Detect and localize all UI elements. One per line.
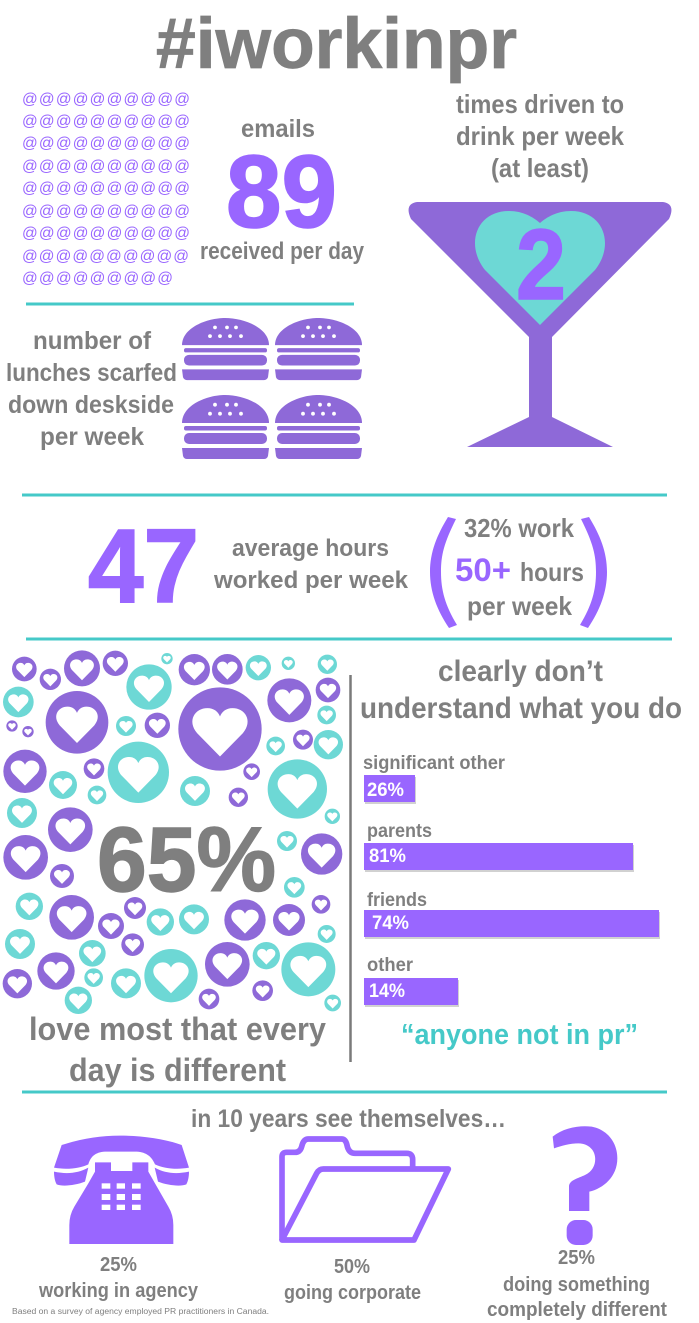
number: 89 emails: 89: [226, 134, 337, 249]
panel: email at-sign grid: @@@@@@@@@: [22, 270, 173, 287]
bar chart: 74%: [372, 913, 409, 934]
lunches text: per week: [40, 423, 144, 451]
heading: clearly don't understand: clearly don’t: [438, 655, 603, 688]
panel: email at-sign grid: @@@@@@@@@@: [22, 180, 190, 197]
lunches text: down deskside: [8, 391, 174, 419]
love most caption: love most that every: [29, 1011, 326, 1047]
bar chart: 26%: [367, 780, 404, 801]
source note: Based on a survey of agency employed PR practitioners in Canada.: [12, 1307, 269, 1316]
heading: in 10 years: in 10 years see themselves…: [191, 1105, 506, 1133]
average hours label: average hours: [232, 535, 389, 562]
heading: clearly don't understand: understand what you do: [360, 692, 682, 725]
caption: working in agency: [38, 1254, 199, 1302]
icon: martini glass with heart and number 2: [409, 202, 671, 447]
drinks heading: [456, 89, 624, 183]
caption: doing something different: doing something: [503, 1274, 650, 1296]
icon: four burgers: [182, 318, 362, 459]
icon: martini glass with heart and number 2: 2: [516, 209, 566, 321]
32% work 50+ hours text: [455, 513, 584, 621]
panel: heart bubbles: [3, 650, 343, 1014]
lunches text: number of: [33, 327, 152, 355]
icon: question mark: [553, 1126, 617, 1245]
title: #iworkinpr: [156, 5, 517, 84]
panel: email at-sign grid: @@@@@@@@@@: [22, 135, 190, 152]
heading: clearly don't understand: [360, 655, 682, 725]
drinks heading: (at least): [491, 153, 589, 183]
number: 47 hours: 47: [88, 508, 199, 625]
love most caption: day is different: [69, 1052, 286, 1088]
panel: email at-sign grid: @@@@@@@@@@: [22, 158, 190, 175]
panel: email at-sign grid: @@@@@@@@@@: [22, 248, 189, 265]
32% work 50+ hours text: 32% work: [464, 513, 574, 543]
number: 65%: 65%: [97, 809, 276, 911]
emails label: emails: [241, 115, 315, 143]
bar chart: significant other: [363, 753, 506, 774]
panel: email at-sign grid: @@@@@@@@@@: [22, 91, 190, 108]
bracket: right parenthesis: [580, 517, 607, 628]
panel: email at-sign grid: @@@@@@@@@@: [22, 225, 190, 242]
lunches text: lunches scarfed: [6, 359, 177, 387]
lunches text: [6, 327, 177, 451]
bar chart: 14%: [369, 981, 405, 1002]
bar chart: friends: [367, 890, 427, 911]
32% work 50+ hours text: hours: [520, 557, 584, 587]
quote: anyone not in pr: “anyone not in pr”: [401, 1019, 638, 1051]
caption: going corporate: [284, 1256, 421, 1304]
bracket: left parenthesis: [430, 517, 457, 628]
32% work 50+ hours text: per week: [467, 591, 573, 621]
caption: doing something different: 25%: [558, 1247, 595, 1269]
bar chart: 81%: [369, 846, 406, 867]
icon: telephone: [54, 1136, 189, 1244]
caption: working in agency: 25%: [100, 1254, 137, 1276]
panel: email at-sign grid: [22, 91, 190, 287]
love most caption: [29, 1011, 326, 1088]
caption: working in agency: working in agency: [38, 1280, 199, 1302]
icon: folder: [282, 1139, 448, 1240]
32% work 50+ hours text: 50+: [455, 552, 511, 588]
caption: doing something different: completely different: [487, 1299, 667, 1321]
received per day label: received per day: [200, 238, 365, 265]
drinks heading: times driven to: [456, 89, 624, 119]
drinks heading: drink per week: [456, 121, 624, 151]
panel: email at-sign grid: @@@@@@@@@@: [22, 113, 190, 130]
panel: email at-sign grid: @@@@@@@@@@: [22, 203, 190, 220]
caption: doing something different: [487, 1247, 667, 1321]
caption: going corporate: 50%: [334, 1256, 370, 1278]
bar chart: other: [367, 955, 414, 976]
caption: going corporate: going corporate: [284, 1282, 421, 1304]
bar chart: parents: [367, 821, 432, 842]
average hours label: [213, 535, 409, 594]
bar chart: [363, 753, 660, 1007]
average hours label: worked per week: [213, 567, 409, 594]
